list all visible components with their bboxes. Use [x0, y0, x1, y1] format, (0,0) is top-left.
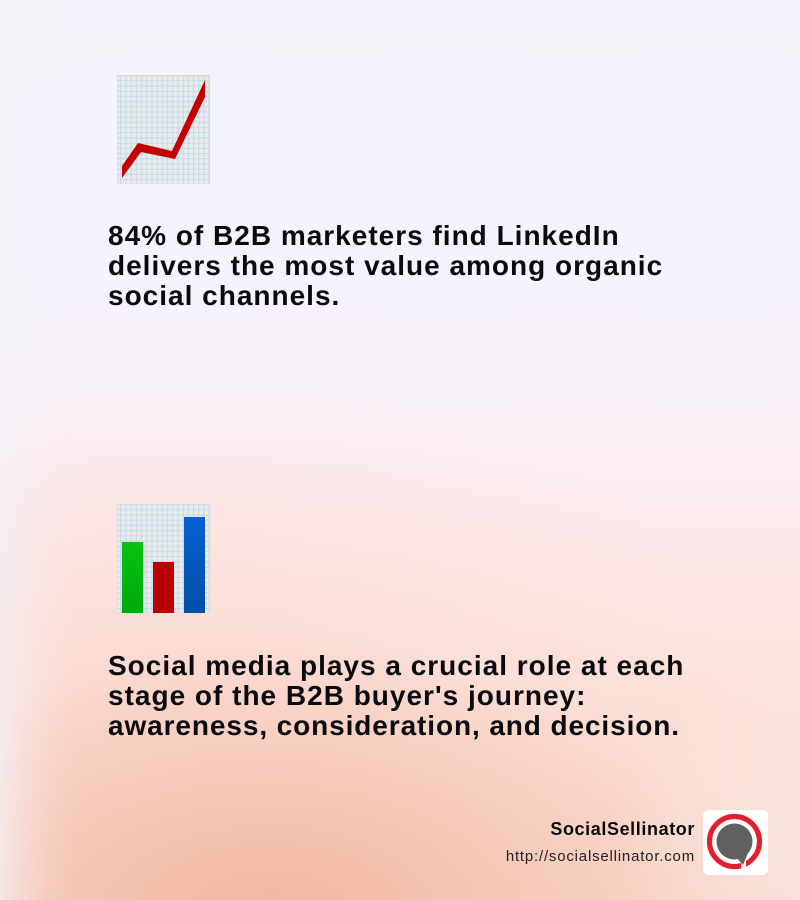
heading: LinkedIn statistic: delivers the most value among organic [108, 250, 663, 281]
heading: buyer's journey statistic [108, 650, 684, 741]
icon: bar chart [117, 504, 210, 613]
website url: http://socialsellinator.com [506, 848, 695, 865]
heading: LinkedIn statistic [108, 220, 663, 311]
brand name: SocialSellinator [550, 819, 695, 839]
heading: buyer's journey statistic: Social media plays a crucial role at each [108, 650, 684, 681]
heading: LinkedIn statistic: social channels. [108, 280, 340, 311]
heading: buyer's journey statistic: stage of the B2B buyer's journey: [108, 680, 586, 711]
heading: LinkedIn statistic: 84% of B2B marketers find LinkedIn [108, 220, 620, 251]
heading: buyer's journey statistic: awareness, consideration, and decision. [108, 710, 680, 741]
logo [703, 810, 768, 875]
icon: line chart [117, 75, 210, 184]
